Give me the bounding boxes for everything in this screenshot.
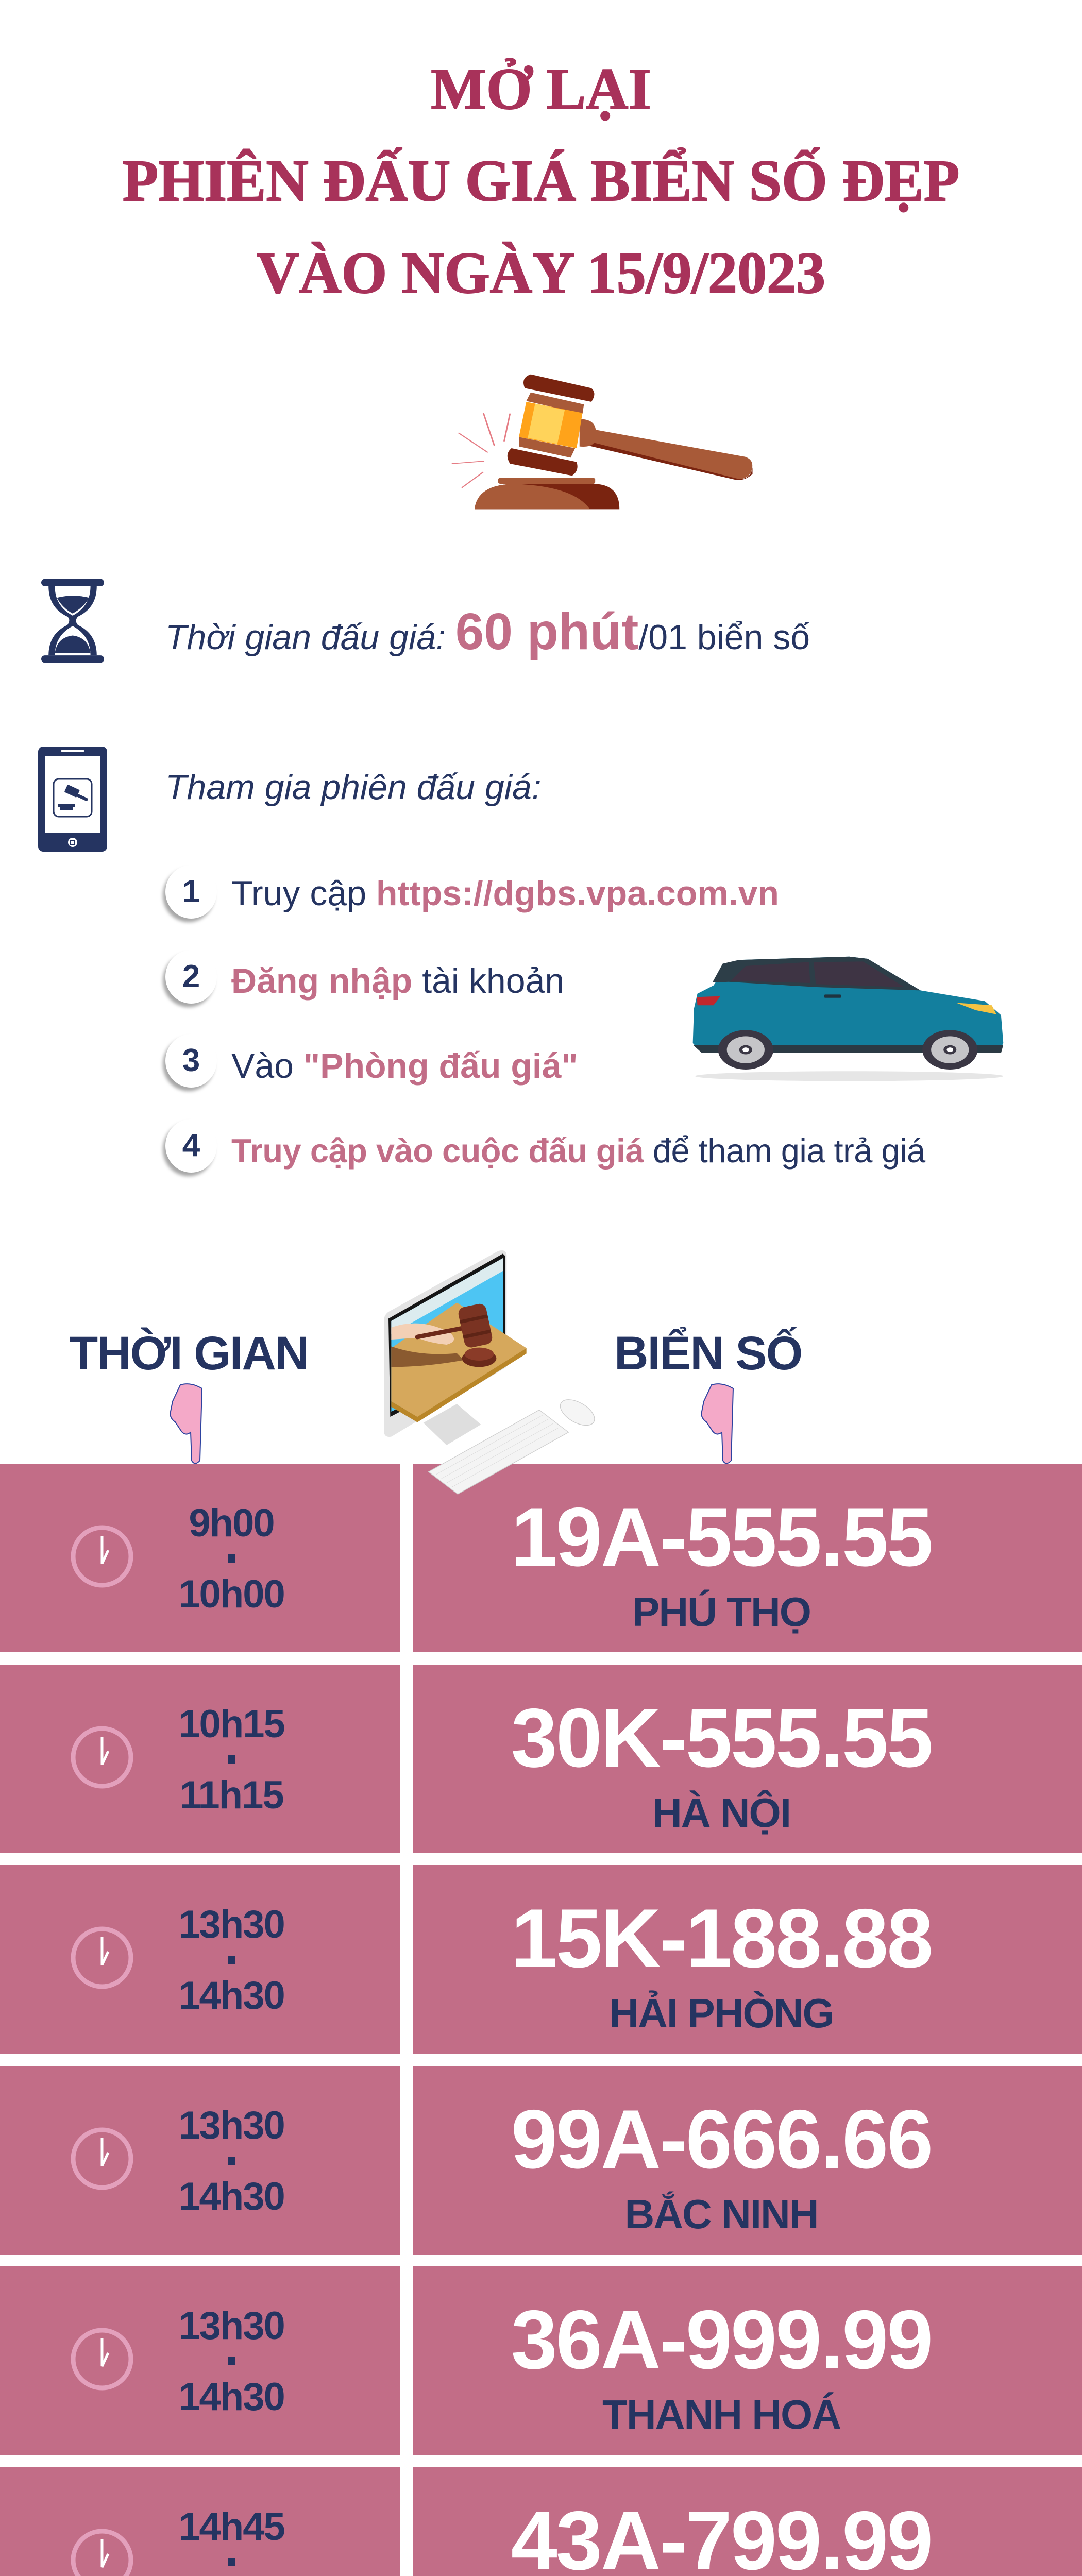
row 1: PHÚ THỌ bbox=[632, 1589, 810, 1635]
icon: pointing hand right bbox=[701, 1383, 734, 1464]
row 4: 99A-666.66 bbox=[511, 2093, 932, 2186]
icon: hourglass bbox=[41, 579, 104, 663]
row 3: 13h30 bbox=[178, 1903, 284, 1946]
icon: pointing hand left bbox=[170, 1383, 202, 1464]
clock icon bbox=[71, 1726, 133, 1789]
heading: plate column: BIỂN SỐ bbox=[614, 1327, 802, 1380]
step 4 bbox=[161, 1123, 925, 1178]
row 6: 14h45 bbox=[178, 2505, 284, 2549]
row 1: 10h00 bbox=[178, 1572, 284, 1616]
clock icon bbox=[71, 2328, 133, 2391]
step 1: Truy cập https://dgbs.vpa.com.vn bbox=[231, 874, 779, 913]
row 2: HÀ NỘI bbox=[652, 1790, 790, 1836]
row 4 bbox=[0, 2066, 1082, 2255]
step 2 bbox=[161, 954, 564, 1009]
clock icon bbox=[71, 1525, 133, 1588]
row 5 bbox=[0, 2266, 1082, 2455]
row 1: 9h00 bbox=[189, 1501, 274, 1545]
clock icon bbox=[71, 2529, 133, 2576]
row 5: 13h30 bbox=[178, 2304, 284, 2348]
text: duration: Thời gian đấu giá: 60 phút/01 biển số bbox=[165, 603, 810, 660]
icon: computer with gavel bbox=[384, 1250, 595, 1495]
row 2: 11h15 bbox=[179, 1773, 283, 1817]
icon: car bbox=[692, 956, 1004, 1081]
row 1: 19A-555.55 bbox=[511, 1490, 932, 1584]
title bbox=[123, 56, 959, 306]
step 3: Vào "Phòng đấu giá" bbox=[231, 1046, 578, 1086]
row 2 bbox=[0, 1665, 1082, 1853]
row 1 bbox=[0, 1464, 1082, 1652]
text: join heading: Tham gia phiên đấu giá: bbox=[165, 768, 542, 807]
row 4: 14h30 bbox=[178, 2175, 284, 2218]
row 2: 30K-555.55 bbox=[511, 1691, 932, 1785]
step 1 bbox=[161, 869, 779, 924]
step 4: 4 bbox=[182, 1128, 200, 1163]
row 5: THANH HOÁ bbox=[602, 2392, 840, 2437]
row 4: 13h30 bbox=[178, 2104, 284, 2147]
clock icon bbox=[71, 2128, 133, 2190]
step 3: 3 bbox=[182, 1043, 200, 1078]
title line 3: VÀO NGÀY 15/9/2023 bbox=[257, 240, 825, 306]
heading: time column: THỜI GIAN bbox=[69, 1327, 308, 1380]
row 3: 15K-188.88 bbox=[511, 1892, 932, 1985]
icon: phone bbox=[38, 747, 107, 852]
row 3: 14h30 bbox=[178, 1974, 284, 2018]
row 2: 10h15 bbox=[178, 1702, 284, 1746]
step 2: Đăng nhập tài khoản bbox=[231, 961, 564, 1001]
row 4: BẮC NINH bbox=[624, 2191, 818, 2237]
step 4: Truy cập vào cuộc đấu giá để tham gia trả giá bbox=[231, 1132, 925, 1170]
step 3 bbox=[161, 1038, 578, 1093]
step 2: 2 bbox=[182, 959, 200, 994]
row 5: 14h30 bbox=[178, 2375, 284, 2419]
title line 1: MỞ LẠI bbox=[431, 56, 651, 122]
row 3 bbox=[0, 1865, 1082, 2054]
title line 2: PHIÊN ĐẤU GIÁ BIỂN SỐ ĐẸP bbox=[123, 148, 959, 213]
clock icon bbox=[71, 1927, 133, 1989]
row 3: HẢI PHÒNG bbox=[609, 1990, 834, 2036]
step 1: 1 bbox=[182, 874, 200, 909]
row 5: 36A-999.99 bbox=[511, 2293, 932, 2386]
row 6 bbox=[0, 2467, 1082, 2576]
icon: gavel bbox=[451, 374, 753, 509]
